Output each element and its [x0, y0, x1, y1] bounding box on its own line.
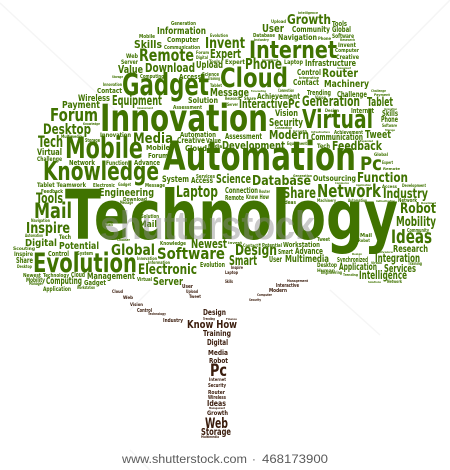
- word: Innovation: Innovation: [100, 97, 268, 140]
- tree canopy: medium and small words: Solutions: [368, 280, 381, 284]
- tree trunk and branches: brown words: Control: [137, 308, 152, 314]
- tree canopy: medium and small words: Advance: [378, 250, 393, 254]
- tree canopy: medium and small words: Infrastructure: [311, 130, 330, 134]
- tree trunk and branches: brown words: Inspire: [231, 265, 243, 270]
- tree canopy: medium and small words: Router: [259, 189, 270, 194]
- word: Virtual: Virtual: [302, 105, 373, 135]
- tree canopy: medium and small words: Design: [352, 252, 362, 256]
- tree canopy: medium and small words: Industry: [383, 187, 428, 202]
- tree canopy: medium and small words: Research: [225, 96, 240, 102]
- tree canopy: medium and small words: Robot: [400, 201, 436, 217]
- tree canopy: medium and small words: Storage: [112, 75, 123, 79]
- tree canopy: medium and small words: Technology: [43, 273, 69, 279]
- tree canopy: medium and small words: Security: [269, 116, 303, 129]
- tree canopy: medium and small words: Expert: [225, 58, 245, 66]
- tree canopy: medium and small words: Generation: [171, 21, 196, 27]
- tree canopy: medium and small words: Expert: [210, 47, 241, 61]
- tree canopy: medium and small words: Inspire: [14, 251, 33, 258]
- tree trunk and branches: brown words: Web: [123, 295, 134, 301]
- footer: image credit and id: [121, 454, 328, 466]
- tree canopy: medium and small words: System: [77, 251, 93, 257]
- tree trunk and branches: brown words: [112, 265, 308, 439]
- tree canopy: medium and small words: Value: [206, 137, 221, 145]
- tree canopy: medium and small words: Training: [208, 76, 220, 81]
- tree canopy: medium and small words: Function: [357, 171, 408, 186]
- tree trunk and branches: brown words: Design: [203, 308, 226, 317]
- tree canopy: medium and small words: Server: [227, 102, 238, 107]
- watermark: shutterstock: shutterstock: [100, 204, 316, 248]
- tree canopy: medium and small words: Challenge: [371, 89, 386, 93]
- tree canopy: medium and small words: Assessment: [225, 132, 262, 141]
- tree canopy: medium and small words: Skills: [382, 109, 398, 118]
- tree trunk and branches: brown words: Management: [287, 279, 308, 283]
- tree canopy: medium and small words: Innovation: [137, 256, 157, 261]
- tree canopy: medium and small words: Application: [356, 183, 371, 187]
- tree canopy: medium and small words: Cloud: [185, 144, 207, 153]
- tree canopy: medium and small words: Tools: [36, 191, 63, 207]
- tree canopy: medium and small words: Authentication: [376, 199, 395, 203]
- tree trunk and branches: brown words: Security: [249, 298, 262, 302]
- footer: image credit and id: 468173900: [262, 454, 328, 466]
- tree canopy: medium and small words: Chooser: [117, 238, 130, 242]
- tree canopy: medium and small words: Research: [340, 38, 355, 42]
- tree canopy: medium and small words: Assessment: [337, 66, 351, 70]
- tree canopy: medium and small words: Management: [87, 272, 136, 282]
- tree canopy: medium and small words: Research: [393, 244, 428, 255]
- tree canopy: medium and small words: Desktop: [43, 122, 91, 138]
- tree canopy: medium and small words: Connection: [275, 126, 292, 130]
- word: Internet: Internet: [249, 36, 337, 64]
- tree canopy: medium and small words: Tweet: [317, 237, 330, 243]
- tree canopy: medium and small words: Information: [148, 260, 170, 265]
- tree canopy: medium and small words: Human: [317, 268, 335, 273]
- tree trunk and branches: brown words: Digital: [207, 338, 228, 347]
- tree canopy: medium and small words: Evolution: [210, 33, 228, 39]
- tree canopy: medium and small words: Pc: [288, 97, 300, 111]
- tree canopy: medium and small words: Engineering: [321, 270, 342, 275]
- tree trunk and branches: brown words: Modern: [269, 288, 287, 294]
- tree canopy: medium and small words: Global: [111, 241, 155, 259]
- tree trunk and branches: brown words: Security: [208, 383, 227, 389]
- tree canopy: medium and small words: Software: [382, 123, 397, 128]
- tree canopy: medium and small words: Contact: [243, 243, 258, 248]
- tree canopy: medium and small words: Application: [43, 286, 71, 293]
- tree canopy: medium and small words: Control: [48, 250, 69, 258]
- tree trunk and branches: brown words: Router: [208, 390, 225, 396]
- tree canopy: medium and small words: Database: [253, 33, 275, 39]
- tree canopy: medium and small words: Feedback: [41, 189, 64, 195]
- tree canopy: medium and small words: Forum: [196, 50, 209, 56]
- tree canopy: medium and small words: Generation: [302, 94, 360, 110]
- tree canopy: medium and small words: Information: [157, 26, 206, 37]
- tree canopy: medium and small words: Software: [332, 33, 354, 40]
- tree trunk and branches: brown words: Pc: [210, 361, 227, 381]
- tree canopy: medium and small words: Electronic: [138, 262, 197, 278]
- tree canopy: medium and small words: Achievement: [257, 92, 300, 101]
- tree canopy: medium and small words: Integrative: [299, 76, 320, 80]
- tree canopy: medium and small words: Forum: [148, 152, 168, 160]
- tree canopy: medium and small words: Generation: [293, 174, 312, 178]
- tree canopy: medium and small words: Global: [332, 25, 351, 34]
- tree canopy: medium and small words: Message: [145, 183, 165, 189]
- tree canopy: medium and small words: Computer: [335, 48, 359, 54]
- tree canopy: medium and small words: Scouting: [13, 246, 35, 251]
- tree trunk and branches: brown words: Media: [208, 349, 228, 357]
- tree canopy: medium and small words: Remote: [225, 194, 244, 202]
- tree canopy: medium and small words: Advance: [295, 247, 323, 257]
- tree canopy: medium and small words: Download: [145, 61, 195, 75]
- tree canopy: medium and small words: Manager: [29, 281, 43, 286]
- tree canopy: medium and small words: Community: [407, 228, 430, 234]
- tree canopy: medium and small words: Skills: [134, 38, 162, 51]
- word: Network: Network: [317, 181, 382, 202]
- tree canopy: medium and small words: Gadget: [118, 182, 131, 187]
- tree canopy: medium and small words: Mail: [139, 220, 157, 230]
- tree canopy: medium and small words: Advance: [134, 159, 160, 167]
- tree canopy: medium and small words: Equipment: [112, 94, 162, 109]
- tree canopy: medium and small words: Intelligence: [359, 268, 407, 282]
- tree canopy: medium and small words: Ideas: [283, 200, 296, 206]
- tree canopy: medium and small words: Tech: [59, 234, 71, 241]
- tree canopy: medium and small words: [13, 11, 436, 293]
- tree canopy: medium and small words: Community: [292, 25, 330, 34]
- tree canopy: medium and small words: Navigation: [31, 218, 50, 223]
- tree canopy: medium and small words: Media: [208, 144, 222, 150]
- tree trunk and branches: brown words: Laptop: [225, 270, 238, 275]
- tree canopy: medium and small words: Computer: [167, 36, 199, 44]
- word: Gadget: Gadget: [122, 68, 209, 103]
- tree canopy: medium and small words: Machinery: [324, 79, 369, 90]
- tree canopy: medium and small words: Tools: [209, 59, 220, 65]
- tree canopy: medium and small words: Challenge: [37, 156, 62, 163]
- tree canopy: medium and small words: Network: [398, 198, 418, 204]
- tree canopy: medium and small words: Phone: [381, 115, 398, 124]
- tree canopy: medium and small words: Phone: [245, 55, 282, 73]
- tree canopy: medium and small words: Innovation: [100, 132, 131, 139]
- tree canopy: medium and small words: Creative: [336, 54, 359, 61]
- tree canopy: medium and small words: Engineering: [99, 186, 154, 199]
- tree canopy: medium and small words: Outsourcing: [313, 174, 356, 183]
- tree canopy: medium and small words: Storage: [85, 138, 100, 144]
- tree canopy: medium and small words: Expanded: [360, 139, 373, 143]
- tree trunk and branches: brown words: Skills: [225, 279, 233, 284]
- tree canopy: medium and small words: Cloud: [71, 271, 85, 279]
- tree canopy: medium and small words: Storage: [385, 128, 395, 132]
- tree canopy: medium and small words: Feedback: [332, 139, 383, 153]
- tree canopy: medium and small words: Creative: [177, 136, 205, 145]
- tree canopy: medium and small words: User: [269, 255, 282, 264]
- tree trunk and branches: brown words: Management: [209, 406, 226, 410]
- tree canopy: medium and small words: Payment: [62, 100, 100, 111]
- tree canopy: medium and small words: Automation: [348, 198, 367, 203]
- tree canopy: medium and small words: Payment: [374, 93, 390, 97]
- tree canopy: medium and small words: Value: [118, 63, 143, 76]
- tree canopy: medium and small words: Multimedia: [285, 254, 329, 265]
- tree canopy: medium and small words: Tech: [317, 142, 330, 150]
- tree canopy: medium and small words: Assessment: [137, 106, 153, 110]
- tree canopy: medium and small words: Design: [325, 108, 339, 113]
- tree canopy: medium and small words: Invent: [205, 34, 245, 52]
- word: Mobile: Mobile: [65, 131, 143, 165]
- tree canopy: medium and small words: User: [262, 22, 284, 35]
- tree canopy: medium and small words: Intelligence: [298, 11, 319, 15]
- tree canopy: medium and small words: Database: [252, 174, 311, 189]
- tree canopy: medium and small words: Web: [126, 53, 139, 60]
- word: Cloud: Cloud: [220, 63, 288, 94]
- tree canopy: medium and small words: Forecasting: [251, 89, 266, 93]
- tree canopy: medium and small words: Access: [179, 73, 201, 81]
- tree canopy: medium and small words: Achievement: [334, 130, 363, 136]
- tree trunk and branches: brown words: Interactive: [276, 283, 299, 289]
- tree canopy: medium and small words: Contact: [97, 87, 123, 95]
- tree canopy: medium and small words: Interactive: [239, 97, 288, 111]
- tree trunk and branches: brown words: Storage: [201, 427, 231, 438]
- tree canopy: medium and small words: Synchronized: [337, 256, 368, 264]
- tree canopy: medium and small words: Potential: [262, 243, 282, 249]
- tree canopy: medium and small words: Services: [196, 174, 215, 180]
- tree canopy: medium and small words: Virtual: [137, 277, 152, 283]
- tree canopy: medium and small words: Workstation: [283, 241, 320, 249]
- footer: image credit and id: ·: [252, 454, 256, 466]
- tree canopy: medium and small words: Vision: [315, 95, 326, 100]
- tree canopy: medium and small words: Potential: [59, 241, 99, 252]
- tree canopy: medium and small words: Mobile: [146, 144, 170, 152]
- tree canopy: medium and small words: Tablet: [367, 95, 393, 109]
- tree canopy: medium and small words: Connection: [225, 186, 258, 195]
- tree canopy: medium and small words: Connection: [278, 88, 294, 93]
- tree canopy: medium and small words: Automation: [180, 131, 216, 139]
- tree canopy: medium and small words: Growth: [293, 129, 307, 133]
- tree canopy: medium and small words: Industry: [254, 38, 270, 42]
- tree trunk and branches: brown words: Wireless: [208, 395, 226, 401]
- tree canopy: medium and small words: Development: [222, 139, 285, 152]
- tree canopy: medium and small words: Software: [157, 244, 225, 263]
- tree canopy: medium and small words: Access: [382, 184, 398, 189]
- word: Automation: Automation: [163, 134, 356, 180]
- tree trunk and branches: brown words: Training: [203, 329, 231, 338]
- tree canopy: medium and small words: Tablet: [210, 83, 222, 88]
- tree trunk and branches: brown words: Technology: [148, 312, 167, 316]
- tree canopy: medium and small words: Share: [16, 256, 33, 265]
- tree canopy: medium and small words: Machinery: [317, 198, 336, 203]
- tree trunk and branches: brown words: Finance: [226, 317, 237, 321]
- tree canopy: medium and small words: Evolution: [200, 261, 225, 269]
- tree canopy: medium and small words: Innovation: [384, 107, 397, 111]
- tree canopy: medium and small words: Know How: [246, 194, 269, 201]
- tree canopy: medium and small words: Computing: [46, 276, 82, 287]
- tree canopy: medium and small words: Network: [69, 159, 95, 167]
- tree canopy: medium and small words: Digital: [25, 238, 57, 249]
- tree canopy: medium and small words: Design: [235, 241, 277, 259]
- tree canopy: medium and small words: Navigation: [278, 33, 317, 42]
- tree canopy: medium and small words: Desktop: [317, 262, 337, 269]
- footer: image credit and id: www.shutterstock.com: [121, 454, 247, 466]
- tree trunk and branches: brown words: Multimedia: [201, 435, 220, 439]
- tree canopy: medium and small words: Function: [106, 159, 128, 167]
- tree canopy: medium and small words: Vision: [275, 109, 298, 119]
- tree canopy: medium and small words: Integration: [375, 251, 420, 265]
- tree canopy: medium and small words: Application: [339, 262, 377, 273]
- tree trunk and branches: brown words: Growth: [207, 410, 228, 417]
- tree canopy: medium and small words: Computing: [140, 74, 164, 80]
- tree canopy: medium and small words: Science: [202, 72, 219, 78]
- tree canopy: medium and small words: Global: [374, 152, 388, 158]
- tree canopy: medium and small words: Knowledge: [160, 241, 186, 247]
- tree canopy: medium and small words: Contact: [293, 78, 319, 87]
- tree canopy: medium and small words: Message: [210, 86, 249, 99]
- tree canopy: medium and small words: Pc: [360, 153, 382, 175]
- tree canopy: medium and small words: Virtual: [37, 148, 62, 158]
- tree canopy: medium and small words: Equipment: [287, 141, 307, 146]
- tree canopy: medium and small words: Upload: [196, 60, 223, 71]
- tree canopy: medium and small words: Phone: [318, 36, 331, 41]
- tree canopy: medium and small words: Science: [216, 172, 251, 186]
- tree trunk and branches: brown words: Cloud: [112, 289, 123, 295]
- tree trunk and branches: brown words: Upload: [186, 289, 198, 294]
- tree canopy: medium and small words: Multimedia: [61, 134, 82, 139]
- tree canopy: medium and small words: Mail: [360, 233, 372, 239]
- tree trunk and branches: brown words: Tweet: [189, 294, 202, 300]
- tree canopy: medium and small words: Feedback: [101, 223, 113, 227]
- tree canopy: medium and small words: Knowledge: [83, 122, 100, 126]
- tree canopy: medium and small words: Gadget: [84, 279, 106, 287]
- tree trunk and branches: brown words: Ideas: [207, 399, 226, 408]
- tree canopy: medium and small words: Challenge: [337, 90, 367, 99]
- tree canopy: medium and small words: Commerce: [335, 181, 349, 185]
- tree canopy: medium and small words: Mobility: [26, 277, 45, 284]
- tree canopy: medium and small words: Modern: [269, 128, 309, 142]
- tree trunk and branches: brown words: Computer: [257, 293, 272, 297]
- tree canopy: medium and small words: Smart: [278, 248, 293, 256]
- tree trunk and branches: brown words: Know How: [187, 318, 237, 331]
- tree canopy: medium and small words: Server: [153, 275, 183, 288]
- tree canopy: medium and small words: Tech: [38, 132, 63, 151]
- tree canopy: medium and small words: Control: [297, 68, 321, 77]
- tree canopy: medium and small words: Innovation: [103, 82, 122, 87]
- tree canopy: medium and small words: Ideas: [391, 226, 432, 248]
- tree canopy: medium and small words: Workstation: [77, 285, 95, 290]
- tree canopy: medium and small words: Server: [121, 59, 138, 66]
- tree canopy: medium and small words: Growth: [287, 13, 331, 28]
- tree canopy: medium and small words: Trending: [307, 89, 331, 97]
- tree canopy: medium and small words: Virtual: [371, 261, 382, 265]
- tree canopy: medium and small words: Infrastructure: [305, 59, 356, 69]
- tree canopy: medium and small words: Newest: [191, 237, 227, 251]
- tree canopy: medium and small words: System: [162, 175, 189, 185]
- tree canopy: medium and small words: Trending: [343, 273, 358, 277]
- tree canopy: medium and small words: Communication: [311, 133, 363, 143]
- tree canopy: medium and small words: Training: [408, 261, 422, 266]
- tree canopy: large words: [33, 36, 398, 279]
- tree canopy: medium and small words: Invent: [338, 41, 356, 49]
- tree canopy: medium and small words: Remote: [383, 167, 401, 171]
- tree canopy: medium and small words: Mobile: [139, 34, 155, 40]
- tree canopy: medium and small words: Expert: [382, 160, 393, 165]
- tree trunk and branches: brown words: Industry: [163, 318, 183, 324]
- tree trunk and branches: brown words: Trending: [203, 317, 215, 321]
- tree canopy: medium and small words: Remote: [139, 46, 194, 66]
- tree canopy: medium and small words: Router: [322, 66, 358, 80]
- tree canopy: medium and small words: Tweet: [365, 128, 391, 141]
- tree canopy: medium and small words: Wireless: [78, 94, 110, 104]
- tree canopy: medium and small words: Inspire: [26, 219, 70, 237]
- tree canopy: medium and small words: Upload: [271, 19, 286, 24]
- tree canopy: medium and small words: Solution: [141, 214, 159, 220]
- tree canopy: medium and small words: Message: [120, 200, 133, 205]
- tree canopy: medium and small words: Solution: [188, 96, 218, 105]
- tree trunk and branches: brown words: Web: [205, 416, 228, 432]
- tree canopy: medium and small words: Tablet Teamwork: [37, 181, 87, 189]
- tree canopy: medium and small words: Share: [283, 184, 316, 202]
- tree trunk and branches: brown words: Internet: [209, 377, 227, 383]
- tree canopy: medium and small words: Desktop: [17, 264, 32, 269]
- tree canopy: medium and small words: Automation: [25, 233, 43, 238]
- tree canopy: medium and small words: Internet: [351, 107, 374, 115]
- tree canopy: medium and small words: Media: [133, 131, 173, 147]
- tree canopy: medium and small words: Assessment: [173, 105, 203, 111]
- word: Evolution: Evolution: [33, 248, 137, 279]
- tree canopy: medium and small words: Digital: [196, 55, 208, 60]
- tree canopy: medium and small words: Communication: [164, 45, 200, 51]
- tree canopy: medium and small words: Smart: [229, 254, 257, 269]
- tree canopy: medium and small words: Mail: [34, 199, 72, 223]
- tree canopy: medium and small words: Electronic: [93, 183, 115, 189]
- tree canopy: medium and small words: Download: [123, 197, 147, 203]
- tree canopy: medium and small words: Appointment: [262, 58, 278, 62]
- tree canopy: medium and small words: Access: [191, 176, 213, 185]
- tree trunk and branches: brown words: User: [182, 284, 193, 290]
- tree canopy: medium and small words: Newest: [23, 273, 41, 279]
- word: Knowledge: Knowledge: [43, 157, 159, 187]
- tree canopy: medium and small words: Download: [421, 201, 436, 205]
- tree canopy: medium and small words: Laptop: [176, 182, 218, 201]
- tree canopy: medium and small words: Share: [244, 96, 256, 102]
- tree canopy: medium and small words: Network: [387, 279, 402, 284]
- tree canopy: medium and small words: Invest: [228, 241, 242, 245]
- tree canopy: medium and small words: Tools: [332, 20, 347, 28]
- tree canopy: medium and small words: Forum: [50, 105, 98, 126]
- tree canopy: medium and small words: Services: [384, 263, 416, 275]
- tree trunk and branches: brown words: Robot: [209, 357, 229, 365]
- tree canopy: medium and small words: Development: [402, 183, 427, 189]
- tree canopy: medium and small words: Laptop: [284, 59, 304, 66]
- tree canopy: medium and small words: Robot: [358, 238, 371, 244]
- tree trunk and branches: brown words: Vision: [130, 302, 143, 308]
